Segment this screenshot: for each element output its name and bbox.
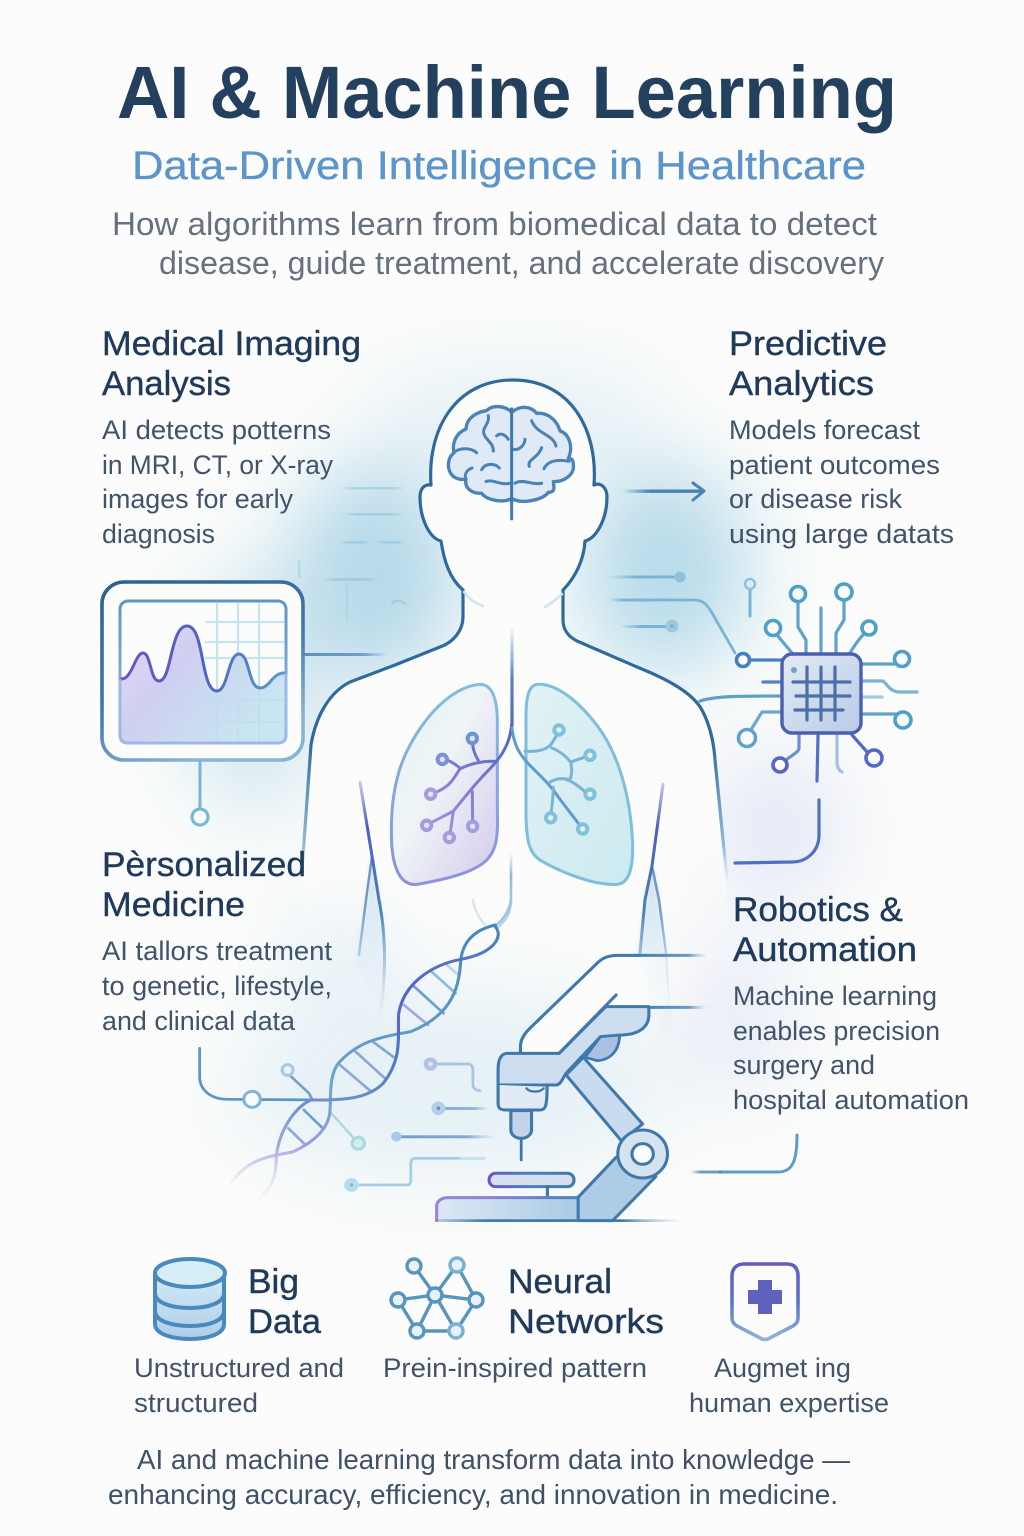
- heading and text: predictive analytics: Analytics: [729, 365, 874, 403]
- title: AI & Machine Learning: [117, 51, 897, 134]
- monitor connector: [198, 760, 202, 809]
- heading and text: robotics and automation: enables precision: [733, 1016, 940, 1046]
- dna rungs: [288, 965, 457, 1145]
- panel: neural networks: [383, 1258, 664, 1383]
- heading and text: robotics and automation: Automation: [733, 931, 917, 969]
- right lung: [512, 684, 633, 884]
- heading and text: personalized medicine: to genetic, lifestyle,: [102, 971, 332, 1001]
- circuit nodes: [736, 584, 911, 772]
- intro text: [112, 206, 884, 281]
- heading and text: medical imaging analysis: in MRI, CT, or X-ray: [102, 450, 333, 480]
- icon: neural network: [391, 1258, 483, 1338]
- dark patch: [585, 1035, 620, 1061]
- support arm: [566, 1057, 643, 1141]
- heading and text: medical imaging analysis: Medical Imaging: [102, 325, 361, 363]
- closing statement: AI and machine learning transform data into knowledge —: [137, 1444, 850, 1475]
- dna strands: [231, 925, 495, 1183]
- heading and text: medical imaging analysis: AI detects potterns: [102, 415, 331, 445]
- body outline: [302, 380, 727, 880]
- heading and text: predictive analytics: Predictive: [729, 325, 887, 363]
- lungs: [391, 684, 633, 884]
- monitor waveform: [121, 626, 285, 742]
- trachea: [510, 628, 514, 725]
- intro text: disease, guide treatment, and accelerate discovery: [159, 245, 884, 281]
- central lower line: [497, 852, 511, 928]
- circuit traces: [700, 602, 917, 863]
- heading and text: predictive analytics: Models forecast: [729, 415, 920, 445]
- human body silhouette: [302, 380, 727, 940]
- base: [437, 1198, 578, 1221]
- heading and text: personalized medicine: and clinical data: [102, 1006, 296, 1036]
- heading and text: predictive analytics: [729, 325, 954, 549]
- heading and text: predictive analytics: using large datats: [729, 519, 954, 549]
- heading and text: robotics and automation: Machine learning: [733, 981, 937, 1011]
- lower head: [498, 1085, 547, 1110]
- panel: big data: structured: [134, 1388, 258, 1418]
- heading and text: medical imaging analysis: [102, 325, 361, 549]
- heading and text: medical imaging analysis: diagnosis: [102, 519, 215, 549]
- intro text: How algorithms learn from biomedical data to detect: [112, 206, 877, 242]
- heading and text: robotics and automation: [733, 891, 969, 1115]
- heading and text: personalized medicine: Medicine: [102, 886, 245, 924]
- neck highlights: [464, 592, 562, 607]
- icon: dna helix: [200, 900, 511, 1198]
- panel: neural networks: Networks: [508, 1303, 664, 1341]
- heading and text: robotics and automation: hospital automation: [733, 1085, 969, 1115]
- panel: neural networks: Neural: [508, 1263, 612, 1301]
- heading and text: predictive analytics: or disease risk: [729, 484, 902, 514]
- heading and text: robotics and automation: surgery and: [733, 1050, 875, 1080]
- icon: ai chip with circuit traces: [700, 584, 917, 863]
- icon: brain: [448, 407, 573, 520]
- chip body: [782, 654, 861, 733]
- panel: big data: Unstructured and: [134, 1353, 344, 1383]
- panel: neural networks: Prein-inspired pattern: [383, 1353, 647, 1383]
- heading and text: robotics and automation: Robotics &: [733, 891, 903, 929]
- connector to robotics text: [690, 1135, 797, 1174]
- panel: big data: Big: [248, 1263, 299, 1301]
- panel: human expertise: Augmet ing: [714, 1353, 851, 1383]
- panel: big data: Data: [248, 1303, 321, 1341]
- upper arm sleeve: [498, 1007, 649, 1085]
- heading and text: personalized medicine: [102, 846, 332, 1036]
- faint data traces left of head: [298, 487, 406, 622]
- subtitle: Data-Driven Intelligence in Healthcare: [132, 144, 866, 188]
- closing statement: [108, 1444, 850, 1510]
- faint data traces right of neck: [608, 572, 755, 653]
- heading and text: medical imaging analysis: Analysis: [102, 365, 231, 403]
- closing statement: enhancing accuracy, efficiency, and innovation in medicine.: [108, 1479, 838, 1510]
- side torso lines: [356, 782, 673, 1067]
- icon: medical shield: [732, 1264, 798, 1340]
- data traces toward microscope: [344, 1057, 495, 1192]
- monitor grid: [205, 603, 284, 741]
- arrow: to predictive analytics: [622, 483, 704, 500]
- objective lens: [511, 1111, 532, 1138]
- heading and text: medical imaging analysis: images for early: [102, 484, 293, 514]
- dna nodes: [244, 1065, 365, 1149]
- panel: big data: [134, 1259, 344, 1418]
- icon: robotic microscope: [435, 955, 706, 1222]
- heading and text: personalized medicine: AI tallors treatment: [102, 936, 332, 966]
- panel: human expertise: [689, 1264, 889, 1418]
- icon: database: [155, 1259, 225, 1339]
- joint: [618, 1130, 667, 1178]
- left lung: [391, 684, 512, 884]
- specimen stage: [489, 1173, 574, 1187]
- heading and text: predictive analytics: patient outcomes: [729, 450, 940, 480]
- upper arm outline: [521, 955, 704, 1053]
- icon: imaging monitor: [102, 582, 389, 825]
- panel: human expertise: human expertise: [689, 1388, 889, 1418]
- dna connector: [200, 900, 511, 1138]
- heading and text: personalized medicine: Pèrsonalized: [102, 846, 306, 884]
